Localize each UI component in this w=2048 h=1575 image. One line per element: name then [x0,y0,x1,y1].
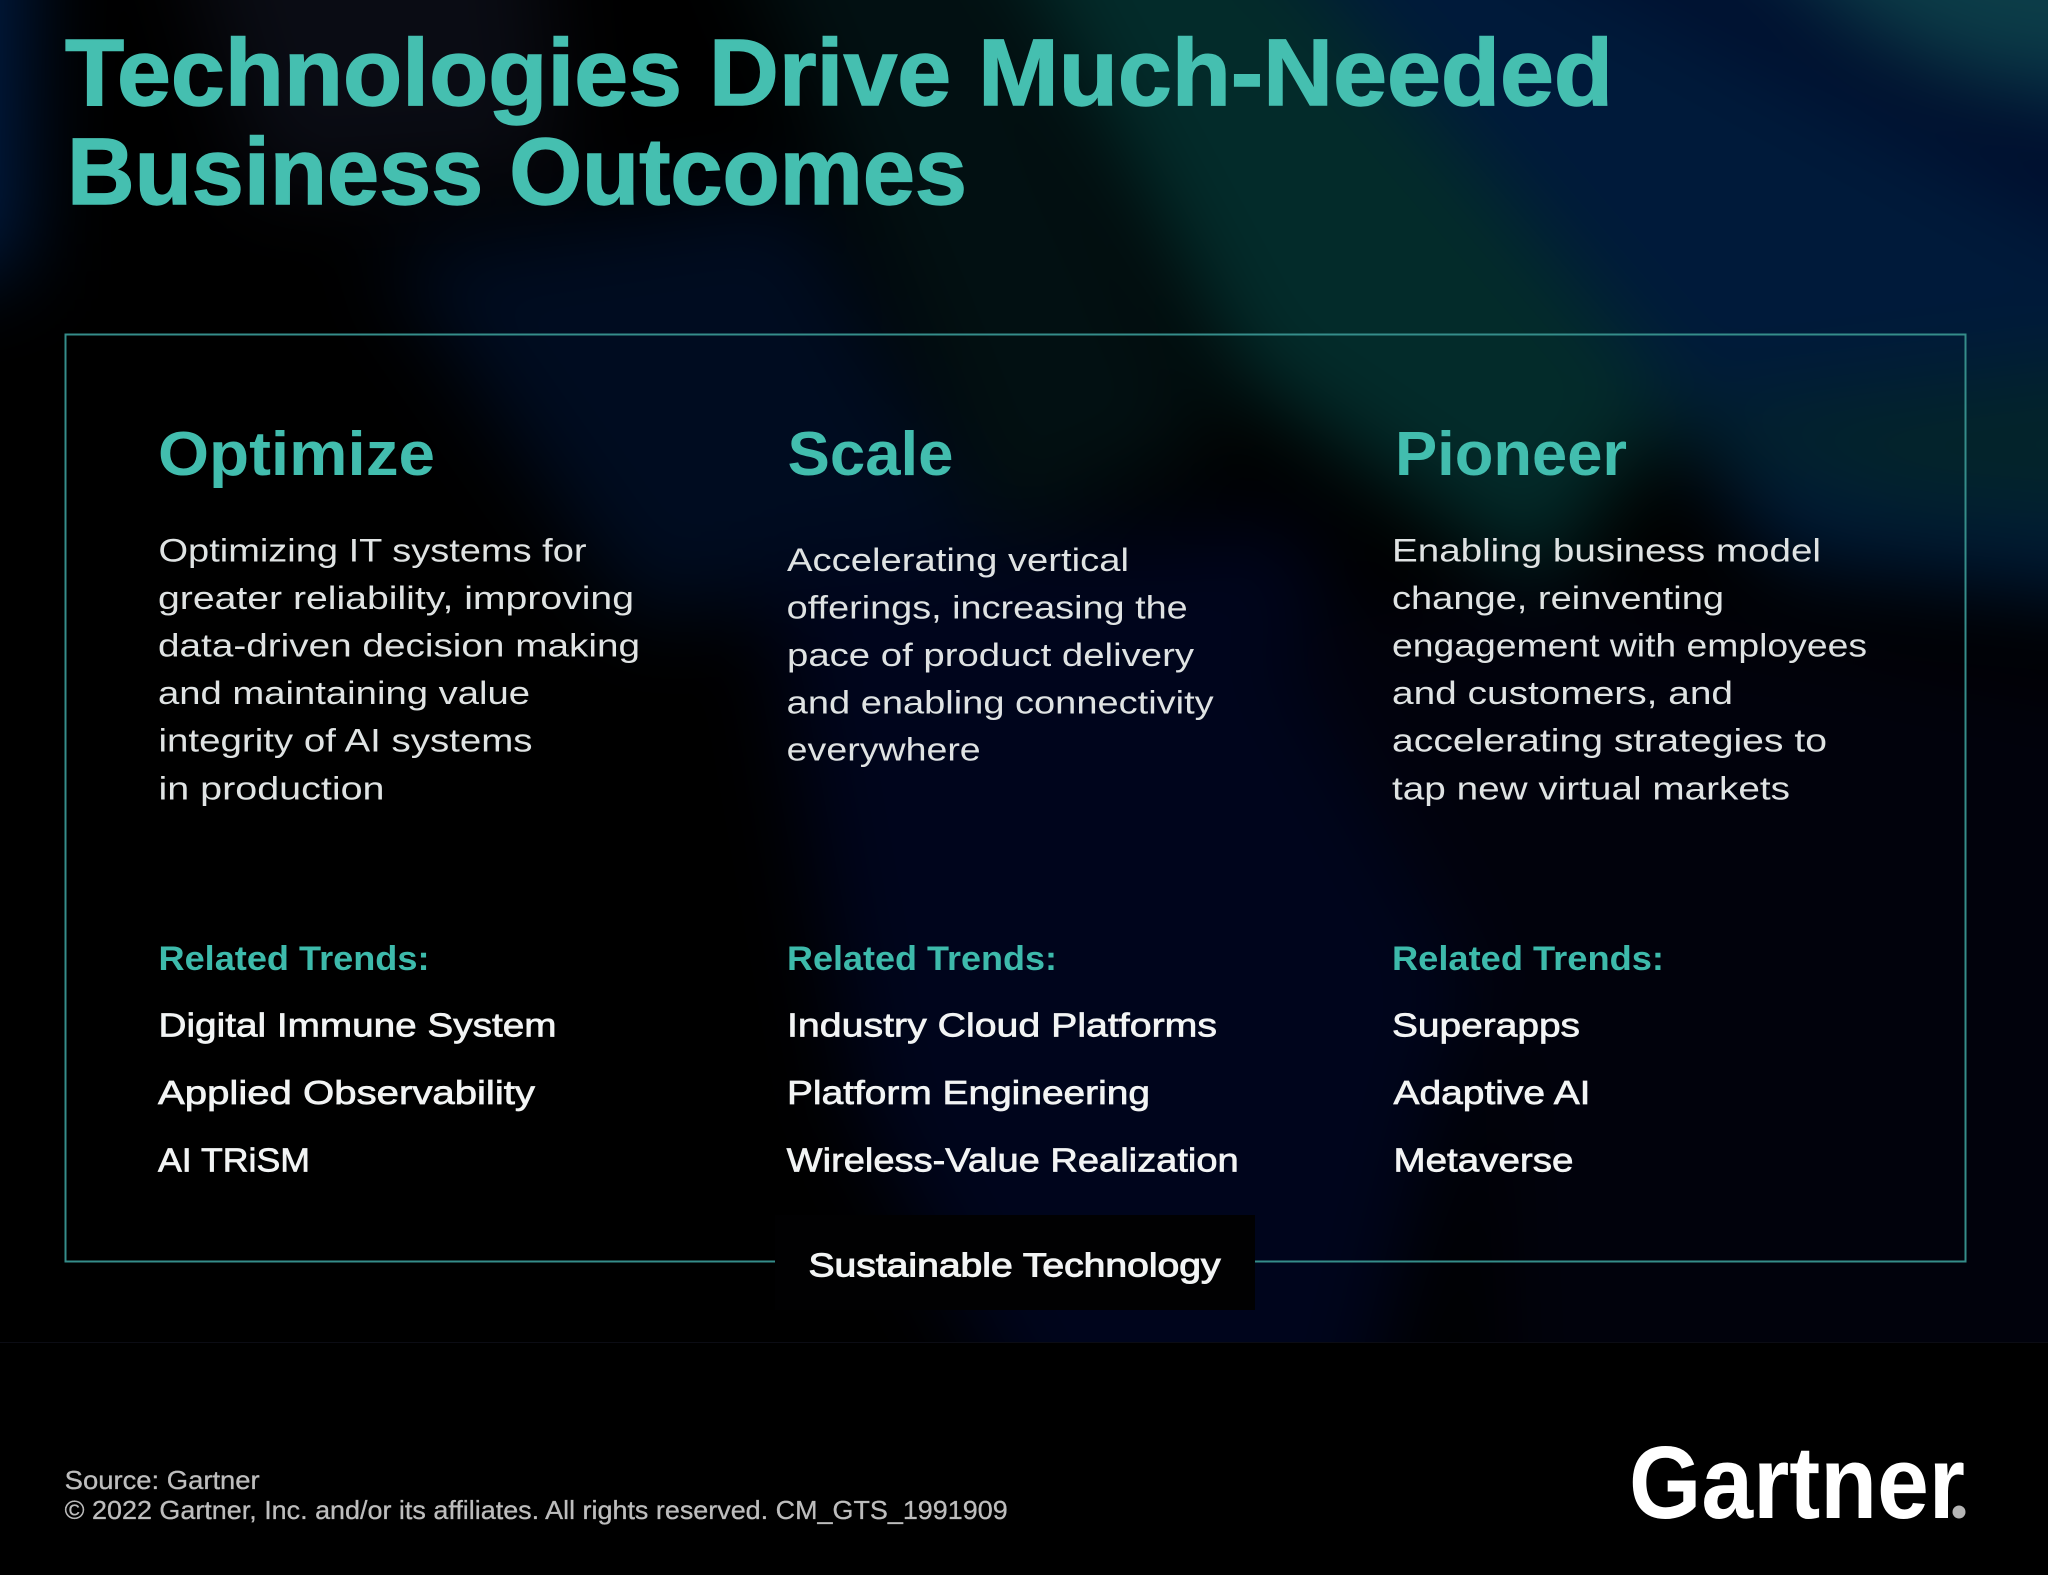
text block: pioneer description [1392,533,1867,806]
footer band separator [0,1342,2048,1343]
heading: scale: Scale [788,420,954,489]
title: Business Outcomes [67,119,967,225]
related trends: pioneer: Adaptive AI [1394,1074,1590,1111]
text block: pioneer description: accelerating strategies to [1392,723,1827,759]
panel: scale [787,420,1239,1179]
panel: optimize [158,420,640,1179]
text block: pioneer description: and customers, and [1392,675,1733,711]
text block: pioneer description: tap new virtual markets [1392,770,1790,806]
text block: optimize description: data-driven decision making [158,628,640,664]
source and copyright: Source: Gartner [65,1465,260,1495]
text block: scale description: everywhere [787,732,981,768]
text block: scale description: pace of product delivery [787,637,1194,673]
related trends: pioneer: Related Trends: [1392,940,1664,978]
source and copyright: © 2022 Gartner, Inc. and/or its affiliates. All rights reserved. CM_GTS_1991909 [65,1495,1008,1525]
heading: pioneer: Pioneer [1395,420,1627,489]
text block: pioneer description: Enabling business model [1392,533,1821,569]
related trends: optimize: Digital Immune System [158,1007,556,1044]
callout: sustainable technology: Sustainable Technology [808,1247,1221,1284]
outlined frame [66,334,1966,1262]
related trends: optimize: AI TRiSM [158,1142,310,1179]
related trends: scale: Wireless-Value Realization [787,1142,1239,1179]
text block: pioneer description: change, reinventing [1392,580,1724,616]
title [65,20,1613,225]
text block: optimize description: and maintaining value [158,675,530,711]
panel: pioneer [1392,420,1867,1179]
footer band [0,1343,2048,1575]
related trends: optimize: Related Trends: [158,940,430,978]
related trends: scale [787,940,1239,1179]
text block: scale description: and enabling connectivity [787,684,1214,720]
related trends: scale: Related Trends: [787,940,1057,978]
title: Technologies Drive Much-Needed [65,20,1613,126]
text block: optimize description: Optimizing IT systems for [158,533,587,569]
related trends: optimize: Applied Observability [158,1074,536,1111]
text block: scale description: offerings, increasing the [787,589,1188,625]
text block: scale description [787,542,1214,768]
logo: Gartner: Gartner [1629,1425,1965,1540]
related trends: scale: Industry Cloud Platforms [787,1007,1217,1044]
related trends: pioneer [1392,940,1664,1179]
text block: optimize description [158,533,640,806]
related trends: pioneer: Superapps [1392,1007,1580,1044]
callout: sustainable technology [775,1215,1255,1310]
text block: pioneer description: engagement with employees [1392,628,1867,664]
related trends: scale: Platform Engineering [787,1074,1150,1111]
text block: optimize description: in production [158,770,384,806]
text block: scale description: Accelerating vertical [787,542,1129,578]
related trends: pioneer: Metaverse [1394,1142,1574,1179]
heading: optimize: Optimize [158,420,435,489]
text block: optimize description: integrity of AI systems [158,723,532,759]
source and copyright [65,1465,1008,1525]
related trends: optimize [158,940,556,1179]
text block: optimize description: greater reliability, improving [158,580,634,616]
